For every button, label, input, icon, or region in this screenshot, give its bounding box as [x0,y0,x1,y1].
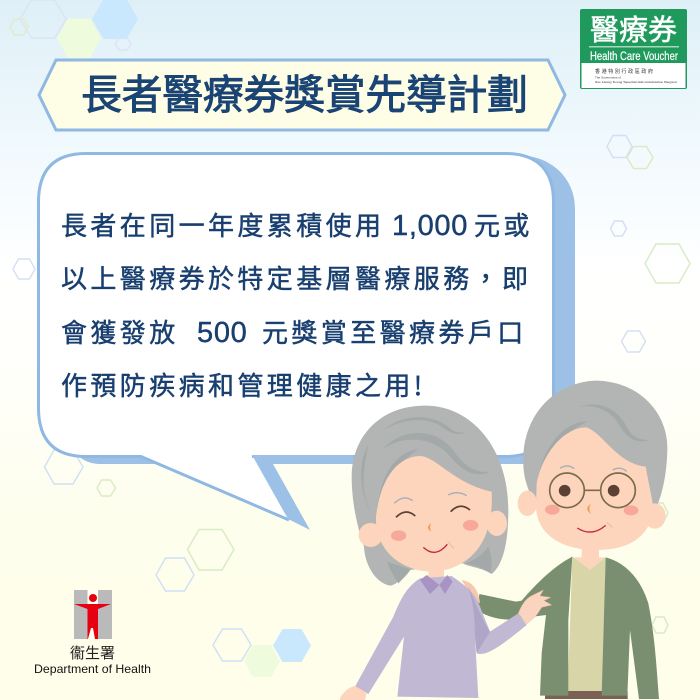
Health Care Voucher logo [580,7,687,89]
Department of Health logo [34,590,151,676]
body text: 元獎賞至醫療券戶口 [262,313,527,350]
Department of Health logo: 衞生署 [70,642,115,663]
woman cheeks [391,530,406,541]
bubble body [38,154,554,522]
body text: 以上醫療券於特定基層醫療服務，即 [61,259,531,296]
title banner [39,60,565,130]
hexagon decoration: right [607,136,690,633]
title: 長者醫療券獎賞先導計劃 [81,61,528,121]
body text: 500 [197,317,248,349]
speech bubble [38,154,575,530]
Department of Health logo: Department of Health [34,662,151,676]
hexagon decoration: left and bottom [13,259,311,677]
Health Care Voucher logo: 醫療券 [590,7,677,49]
icon: department emblem [74,590,112,639]
body text [61,206,533,403]
tail edge [252,455,353,530]
body text: 1,000 [392,210,468,242]
man cardigan [478,557,572,696]
bubble shadow [78,156,575,464]
woman [340,406,552,700]
man brows [560,466,627,471]
Health Care Voucher logo: the Hong Kong Special Administrative Region [595,80,677,84]
woman neck [428,569,444,586]
man nose [587,504,591,514]
man cheeks [545,505,560,515]
man mouth [577,525,606,532]
body text: 作預防疾病和管理健康之用! [61,366,426,403]
body text: 長者在同一年度累積使用 [61,206,384,243]
man [478,381,667,699]
man hand on shoulder [462,580,480,603]
man hair [523,381,667,533]
woman nose [428,523,431,532]
Health Care Voucher logo: The Government of [595,76,621,80]
woman lower hand [340,686,367,700]
body text: 會獲發放 [61,313,179,350]
man neck [573,547,606,571]
woman hair [352,406,508,586]
Health Care Voucher logo: 香港特別行政區政府 [595,68,653,75]
woman brows [394,493,467,503]
man shirt [568,557,606,692]
woman sweater [355,576,527,698]
hexagon decoration: top left [10,0,138,58]
woman eyes [396,506,470,517]
woman hand [518,590,552,624]
woman sleeve shade [468,587,490,653]
man face [536,427,653,550]
body text: 元或 [474,206,533,243]
man glasses [550,473,635,508]
woman mouth [423,544,447,552]
man eyes [559,485,570,496]
illustration: elderly couple [340,381,667,700]
Health Care Voucher logo: Health Care Voucher [590,51,678,63]
man trousers [545,691,628,699]
man ears [518,491,537,516]
woman face [376,456,492,572]
woman ears [359,523,383,547]
woman collar [420,575,439,594]
